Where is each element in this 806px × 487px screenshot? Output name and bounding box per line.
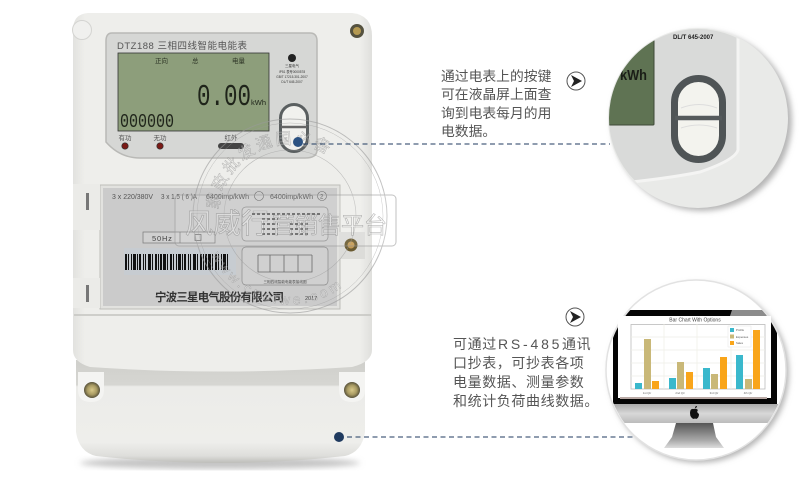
watermark: 家政批发通国必备 bbox=[206, 130, 330, 210]
axis labels: 3rd Qtr bbox=[710, 391, 718, 395]
manufacturer name: 宁波三星电气股份有限公司 bbox=[155, 290, 284, 304]
LCD close-up bbox=[609, 40, 654, 126]
text block: RS-485 description bbox=[453, 336, 599, 409]
bar chart bbox=[618, 316, 771, 399]
push button bbox=[280, 104, 308, 152]
icon: arrow button top bbox=[567, 72, 585, 90]
wiring diagram bbox=[242, 247, 328, 285]
model heading: DTZ188 三相四线智能电能表 bbox=[117, 40, 247, 52]
indicator lights: 无功 bbox=[154, 134, 167, 142]
recessed panel bbox=[610, 29, 736, 180]
ratings: 3 x 220/380V bbox=[112, 194, 153, 201]
watermark: www.cneiwe.com bbox=[212, 251, 342, 304]
LCD screen: 000000 bbox=[120, 111, 174, 133]
text block: RS-485 description: 可通过 bbox=[453, 336, 497, 352]
manufacturer mark: GB/T 17215.301-2007 bbox=[276, 75, 308, 79]
frequency box bbox=[143, 232, 215, 243]
text block: button description: 可在液晶屏上面查 bbox=[441, 87, 552, 102]
screws bbox=[72, 20, 365, 402]
button close-up bbox=[674, 78, 722, 160]
upper meter body bbox=[73, 13, 372, 372]
axis labels bbox=[643, 391, 752, 395]
manufacturer mark: IP51 表号0000578 bbox=[279, 69, 305, 74]
monitor bezel bbox=[613, 310, 777, 404]
indicator lights bbox=[118, 133, 244, 149]
callout line: communication bbox=[334, 432, 636, 442]
barcode bbox=[124, 248, 236, 275]
standard number: DL/T 645-2007 bbox=[673, 35, 714, 41]
hinges bbox=[73, 184, 100, 230]
circle detail: computer monitor bbox=[600, 280, 790, 463]
text block: RS-485 description: 通讯 bbox=[562, 336, 591, 352]
text block: RS-485 description: 和统计负荷曲线数据。 bbox=[453, 393, 599, 409]
indicator lights: 红外 bbox=[224, 133, 238, 142]
plot area bbox=[631, 324, 765, 389]
electricity meter bbox=[72, 13, 372, 469]
manufacturer mark: 三星电气 bbox=[285, 63, 299, 68]
LCD screen: 电量 bbox=[232, 56, 246, 65]
text block: button description bbox=[441, 69, 552, 139]
LCD screen: 总 bbox=[192, 56, 199, 65]
indicator lights: 有功 bbox=[118, 133, 132, 142]
frequency box: 50Hz bbox=[152, 234, 173, 243]
watermark: 风威行 bbox=[185, 208, 269, 239]
series: expenses bbox=[644, 339, 752, 389]
lower terminal cover bbox=[76, 360, 365, 463]
text block: button description: 通过电表上的按键 bbox=[441, 69, 552, 84]
chart legend: Sales bbox=[736, 341, 744, 345]
series: sales bbox=[652, 330, 760, 389]
monitor chin bbox=[614, 404, 778, 423]
meter shadow bbox=[80, 457, 360, 469]
LCD screen: 正向 bbox=[155, 56, 168, 65]
chart legend: Expenses bbox=[736, 335, 749, 339]
ratings bbox=[112, 192, 326, 201]
axis labels: 2nd Qtr bbox=[675, 391, 685, 395]
text block: RS-485 description: 口抄表，可抄表各项 bbox=[453, 355, 584, 371]
watermark bbox=[174, 118, 396, 314]
axis labels: 4th Qtr bbox=[744, 391, 752, 395]
LCD screen: kWh bbox=[251, 98, 266, 107]
nameplate: 2017 bbox=[305, 296, 317, 302]
icon: arrow button bottom bbox=[566, 308, 584, 326]
text block: button description: 电数据。 bbox=[441, 124, 496, 139]
wiring diagram: 三相四线智能电能表接线图 bbox=[263, 279, 307, 284]
text block: RS-485 description: RS-485 bbox=[498, 336, 562, 352]
manufacturer mark bbox=[276, 54, 308, 84]
chart legend: Profits bbox=[736, 328, 745, 332]
chart title: Bar Chart With Options bbox=[669, 318, 721, 324]
text block: RS-485 description: 电量数据、测量参数 bbox=[453, 374, 584, 390]
specification table bbox=[242, 207, 328, 241]
ratings: 2 bbox=[320, 194, 324, 200]
nameplate bbox=[73, 184, 340, 309]
series: profits bbox=[635, 355, 743, 389]
chart legend bbox=[728, 326, 751, 347]
ratings: 6400imp/kWh bbox=[270, 194, 313, 201]
ratings: 3 x 1.5 ( 6 )A bbox=[161, 194, 197, 201]
watermark: 营销售平台 bbox=[272, 212, 387, 238]
circle detail: button close-up: kWh bbox=[620, 67, 647, 84]
ratings: 6400imp/kWh bbox=[206, 194, 249, 201]
display recess bbox=[106, 33, 317, 158]
callout line: button bbox=[293, 137, 610, 147]
LCD screen: 0.00 bbox=[197, 80, 251, 115]
circle detail: button close-up bbox=[590, 20, 792, 211]
LCD screen bbox=[118, 53, 269, 133]
axis labels: 1st Qtr bbox=[643, 391, 651, 395]
manufacturer mark: DL/T 645-2007 bbox=[281, 80, 303, 84]
icon: apple logo bbox=[690, 406, 699, 419]
text block: button description: 询到电表每月的用 bbox=[441, 106, 551, 121]
monitor stand bbox=[664, 423, 724, 448]
